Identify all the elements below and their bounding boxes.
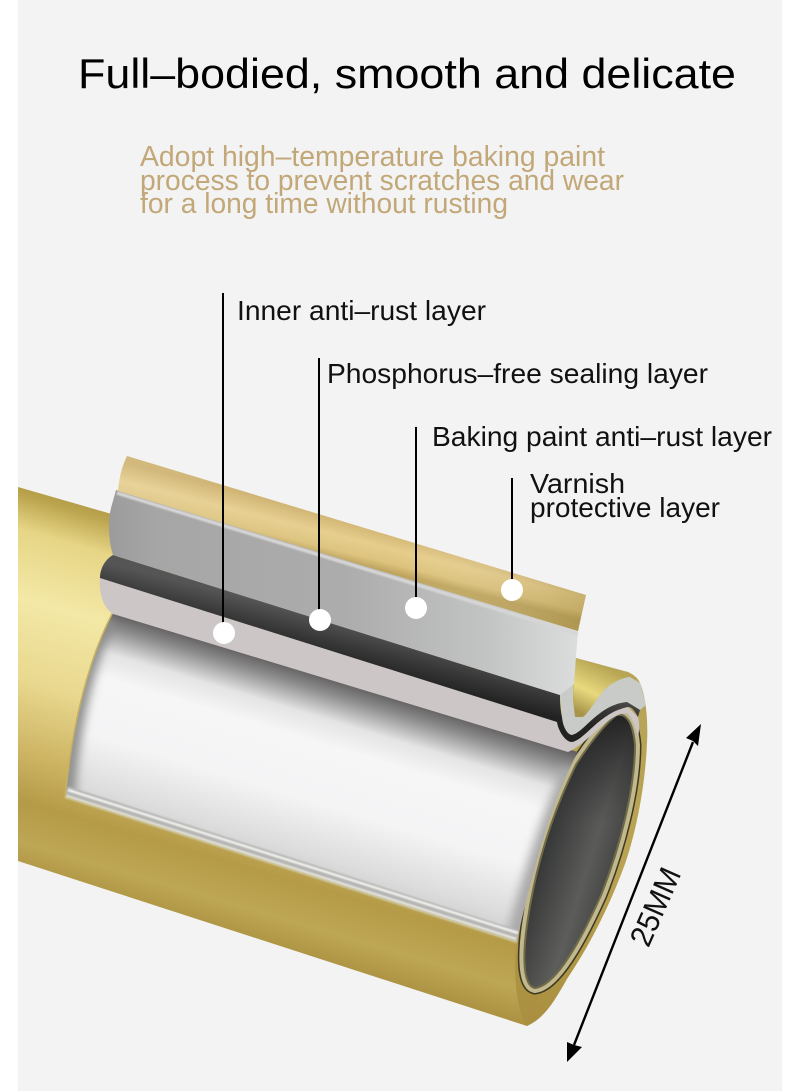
callout: baking paint anti-rust layer: Baking paint anti–rust layer: [432, 421, 772, 452]
sealing layer black band: [100, 555, 640, 742]
callout: varnish protective layer: [501, 468, 720, 601]
callout: inner anti-rust layer: Inner anti–rust layer: [237, 295, 486, 326]
varnish gold strip: [118, 456, 586, 631]
inner anti-rust layer: [100, 578, 639, 752]
title: Full–bodied, smooth and delicate: [78, 50, 736, 97]
callout: inner anti-rust layer: [213, 293, 486, 644]
rear gold shine: [573, 658, 630, 717]
baking paint gray band: [109, 490, 578, 695]
subtitle text block: for a long time without rusting: [140, 188, 508, 220]
subtitle text block: process to prevent scratches and wear: [140, 165, 624, 197]
callout: baking paint anti-rust layer: [405, 421, 772, 619]
subtitle text block: [140, 141, 624, 220]
callout: varnish protective layer: Varnish: [530, 468, 625, 499]
silver lower edge: [65, 797, 517, 942]
left cut edge of gold: [65, 612, 113, 797]
inner silver surface: [65, 612, 578, 942]
callout: varnish protective layer: protective layer: [530, 492, 720, 523]
tube body: [18, 487, 576, 1026]
diameter arrow: [567, 724, 701, 1062]
callout: phosphorus-free sealing layer: Phosphorus–free sealing layer: [327, 358, 708, 389]
gray band highlight: [117, 493, 578, 634]
light gray wave ribbon: [560, 632, 646, 735]
tube end rim: [515, 658, 647, 1026]
diameter label: 25MM: [623, 862, 688, 951]
tube opening: [525, 716, 634, 987]
gold tube with cutaway layers: [18, 456, 647, 1026]
subtitle text block: Adopt high–temperature baking paint: [140, 141, 605, 173]
opening top shading: [525, 716, 634, 987]
callout: phosphorus-free sealing layer: [309, 358, 708, 631]
strip tone overlay: [118, 456, 586, 631]
